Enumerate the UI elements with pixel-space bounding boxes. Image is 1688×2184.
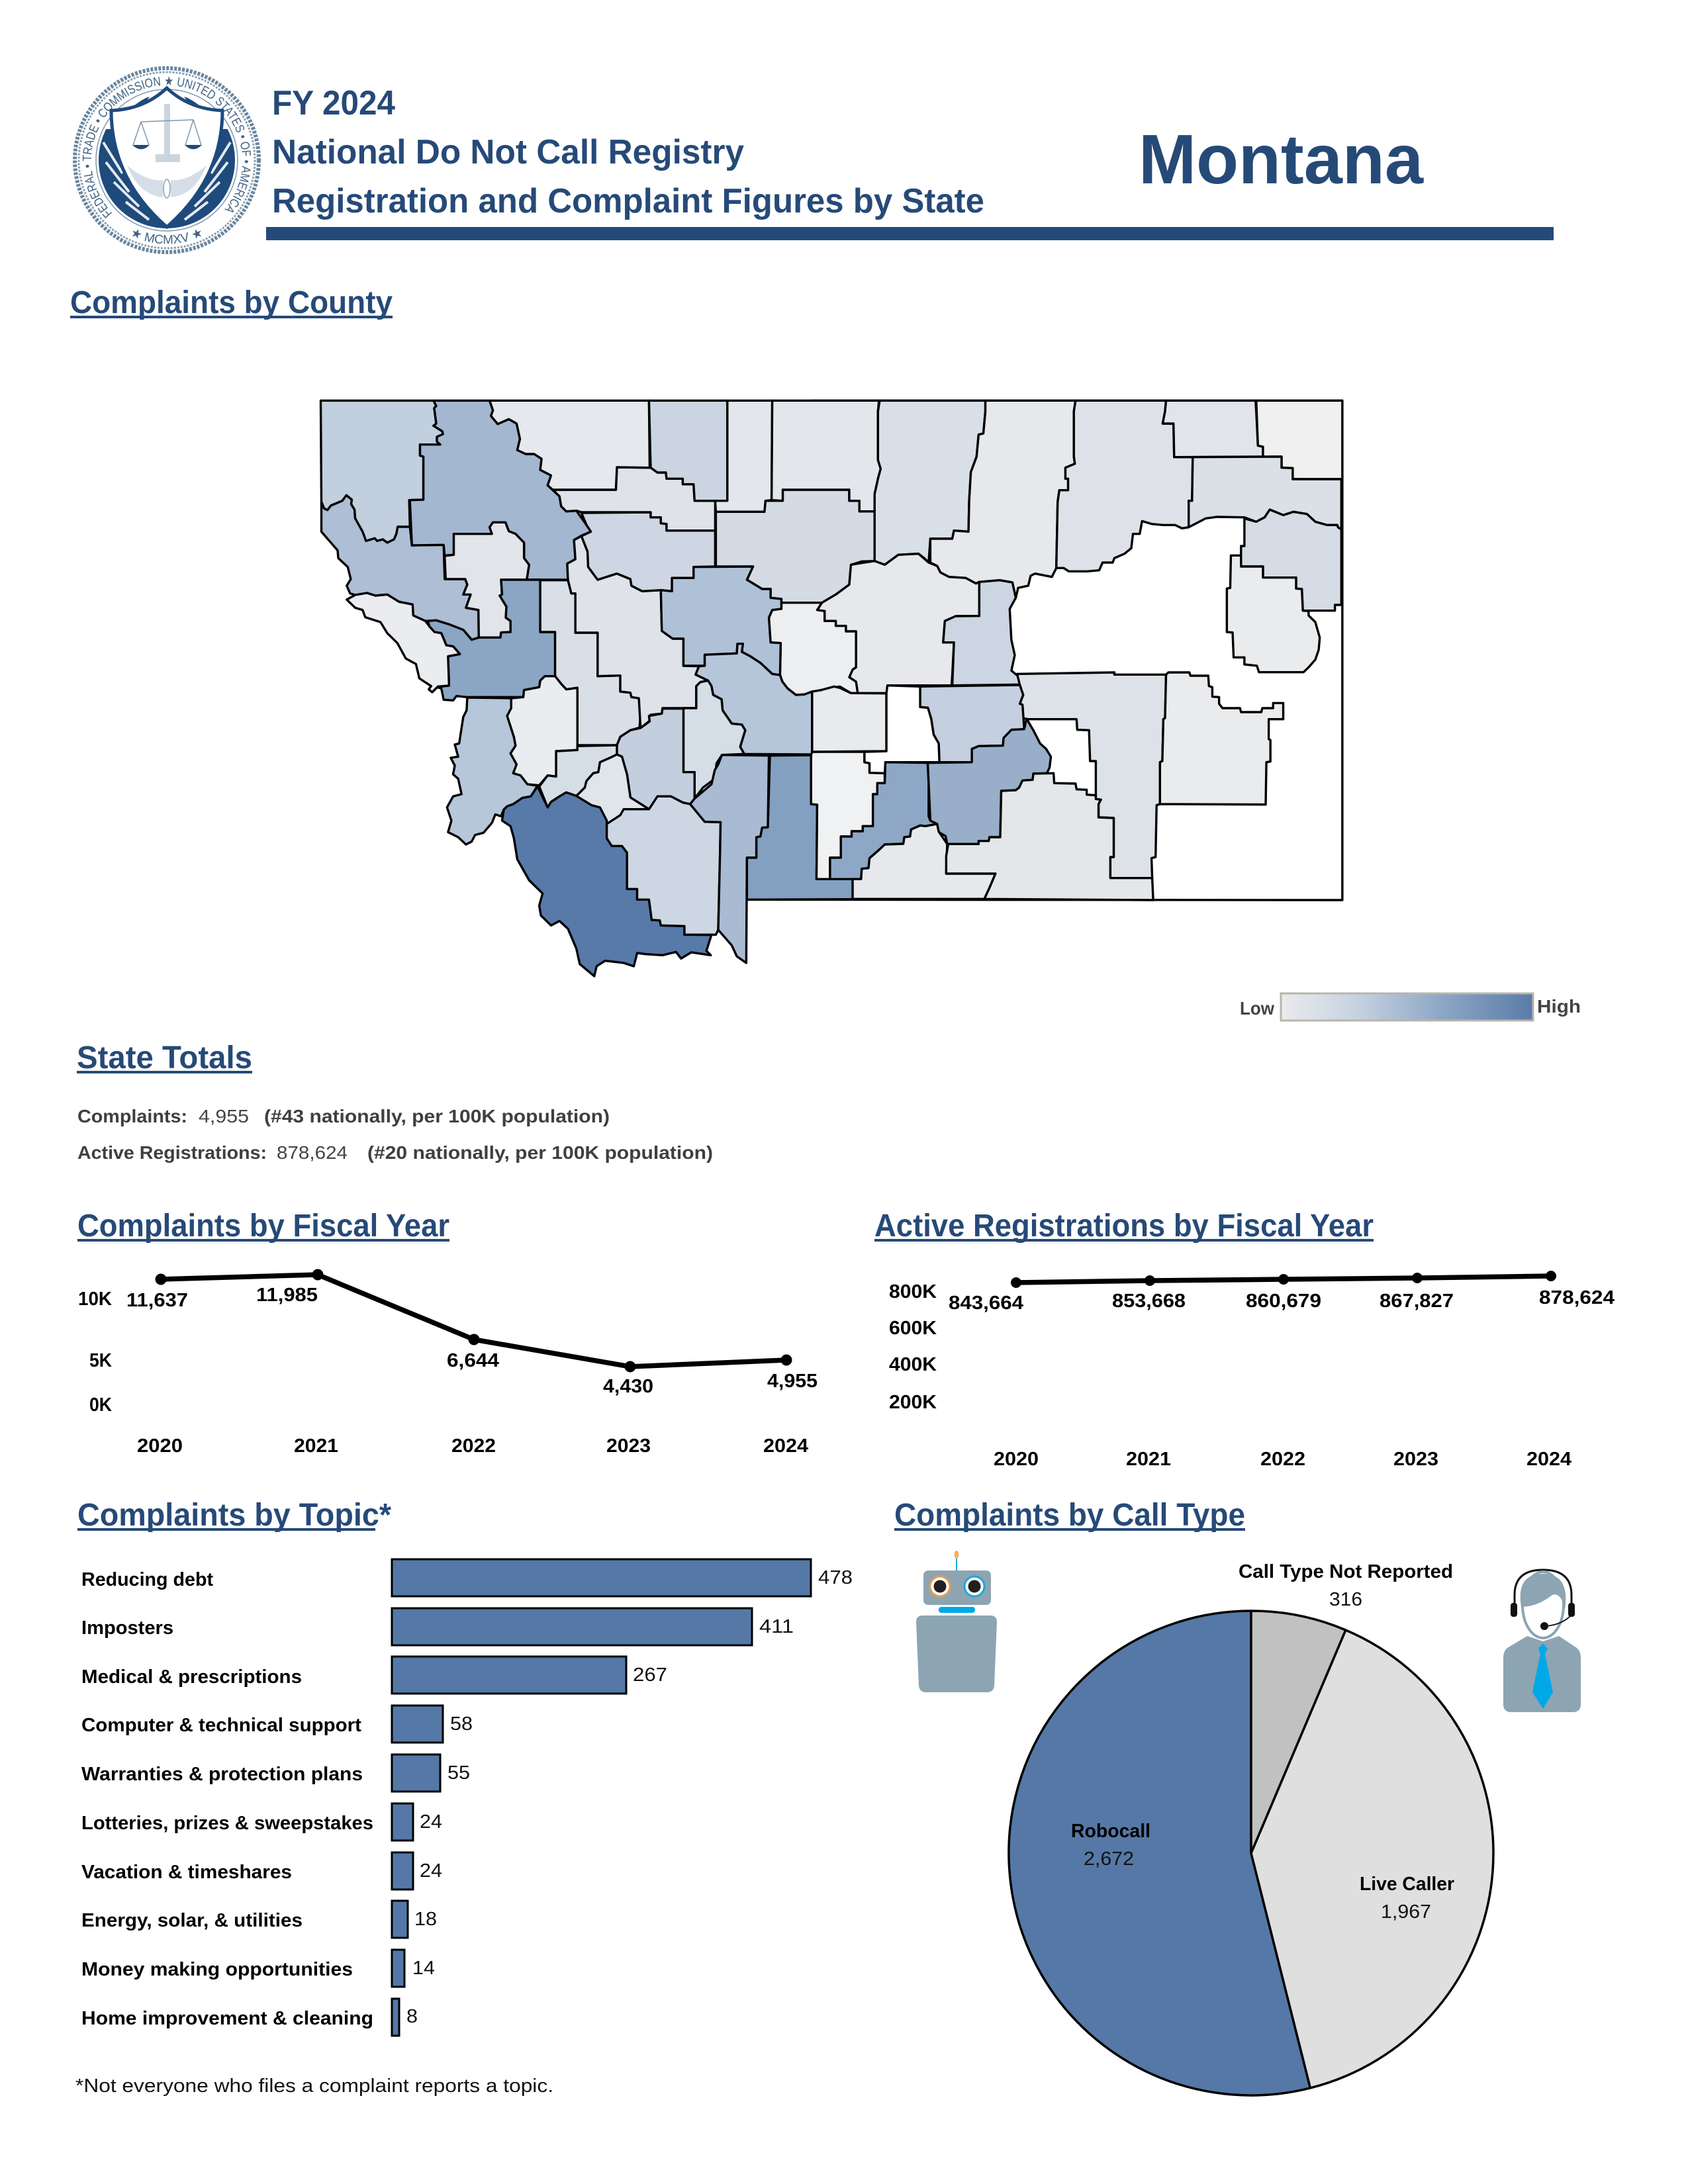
pie label: live caller xyxy=(1360,1874,1454,1923)
bar values: 55 xyxy=(447,1762,470,1784)
state name: Montana xyxy=(1139,120,1424,199)
title: fiscal year: FY 2024 xyxy=(272,84,395,122)
data labels: 6,644 xyxy=(447,1350,499,1371)
county: Dawson xyxy=(1227,555,1320,672)
county: Broadwater xyxy=(683,680,745,799)
slice: live caller xyxy=(1251,1630,1493,2088)
map: Montana counties xyxy=(320,400,1342,976)
topic labels: Energy, solar, & utilities xyxy=(81,1910,303,1931)
x axis labels xyxy=(994,1449,1571,1470)
state totals: complaints: Complaints: xyxy=(77,1106,187,1126)
pie label: live caller: 1,967 xyxy=(1381,1901,1431,1923)
county: Missoula xyxy=(428,580,555,700)
line chart: complaints by fiscal year xyxy=(78,1269,818,1457)
x axis labels: 2020 xyxy=(137,1435,183,1457)
data labels: 878,624 xyxy=(1539,1287,1615,1308)
heading: active registrations by fiscal year: Active Registrations by Fiscal Year xyxy=(874,1208,1374,1244)
county: Lincoln xyxy=(320,400,443,543)
heading: state totals: State Totals xyxy=(77,1040,252,1075)
bars xyxy=(392,1559,811,2036)
county: Richland xyxy=(1241,510,1341,611)
county: Deer Lodge xyxy=(539,745,617,807)
county: Custer xyxy=(1017,672,1166,878)
bar chart: complaints by topic xyxy=(81,1559,853,2036)
county: Lake xyxy=(445,522,529,637)
county: Mineral xyxy=(347,593,460,692)
data labels: 867,827 xyxy=(1380,1291,1454,1312)
county: Wheatland xyxy=(812,686,886,752)
y axis labels: 400K xyxy=(889,1354,937,1375)
data labels: 853,668 xyxy=(1112,1291,1186,1312)
heading: complaints by topic: Complaints by Topic* xyxy=(77,1498,391,1533)
county: Pondera xyxy=(553,467,715,531)
topic labels: Medical & prescriptions xyxy=(81,1666,302,1688)
x axis labels: 2022 xyxy=(1260,1449,1305,1470)
header rule xyxy=(266,227,1554,240)
topic labels: Money making opportunities xyxy=(81,1959,353,1980)
county base: no-data area with state outline xyxy=(747,400,1342,900)
y axis labels: 0K xyxy=(89,1394,112,1416)
series line xyxy=(161,1275,786,1367)
county: Meagher xyxy=(696,644,812,754)
county: Fallon xyxy=(1160,672,1284,805)
y axis labels: 5K xyxy=(89,1350,112,1371)
county: Jefferson xyxy=(617,709,694,809)
y axis labels: 600K xyxy=(889,1318,937,1339)
y axis labels: 200K xyxy=(889,1392,937,1413)
county: Lewis and Clark xyxy=(567,536,708,728)
state totals: active registrations: (#20 nationally, per 100K population) xyxy=(367,1142,713,1163)
x axis labels: 2021 xyxy=(294,1435,338,1457)
data labels: 4,430 xyxy=(603,1376,653,1397)
data labels xyxy=(949,1287,1615,1314)
county: Park xyxy=(747,755,853,899)
county: Phillips xyxy=(930,400,1076,598)
title: subtitle: Registration and Complaint Figures by State xyxy=(272,182,984,220)
pie label: robocall: 2,672 xyxy=(1084,1848,1134,1870)
bar values: 478 xyxy=(818,1567,853,1588)
title block xyxy=(272,84,984,220)
markers xyxy=(155,1269,792,1373)
line chart: active registrations by fiscal year xyxy=(889,1271,1615,1470)
bar values xyxy=(406,1567,853,2027)
county: Roosevelt xyxy=(1189,457,1341,529)
bar values: 14 xyxy=(412,1958,435,1979)
series line xyxy=(1016,1276,1551,1283)
county: Musselshell xyxy=(865,686,939,773)
county: Stillwater xyxy=(830,762,937,879)
x axis labels: 2021 xyxy=(1126,1449,1171,1470)
state totals: complaints: (#43 nationally, per 100K population) xyxy=(264,1106,610,1126)
x axis labels xyxy=(137,1435,808,1457)
bar values: 267 xyxy=(633,1664,667,1686)
data labels: 11,985 xyxy=(256,1285,318,1306)
state totals: complaints xyxy=(77,1106,610,1126)
county: Powell xyxy=(540,580,641,745)
heading: complaints by fiscal year: Complaints by Fiscal Year xyxy=(77,1208,449,1244)
topic labels: Imposters xyxy=(81,1617,173,1639)
county: Blaine xyxy=(874,400,986,565)
county: Golden Valley xyxy=(920,685,1024,762)
county: Carbon xyxy=(853,824,996,899)
county: Glacier xyxy=(490,400,649,490)
county: Beaverhead xyxy=(502,786,712,976)
bar values: 411 xyxy=(759,1616,794,1637)
county: Petroleum xyxy=(943,580,1020,686)
county: Granite xyxy=(507,676,577,786)
slice: robocall xyxy=(1009,1611,1310,2095)
data labels xyxy=(126,1285,818,1397)
county: Sheridan xyxy=(1256,400,1342,479)
state totals: active registrations: Active Registrations: xyxy=(77,1142,267,1163)
state totals: complaints: 4,955 xyxy=(199,1106,249,1126)
bar values: 24 xyxy=(420,1860,442,1882)
pie label: call type not reported: 316 xyxy=(1329,1589,1362,1610)
county: Gallatin xyxy=(690,755,769,963)
pie label: call type not reported xyxy=(1239,1561,1453,1610)
county: Madison xyxy=(607,796,721,934)
x axis labels: 2023 xyxy=(606,1435,651,1457)
bar values: 8 xyxy=(406,2006,418,2027)
footnote: *Not everyone who files a complaint reports a topic. xyxy=(75,2075,553,2097)
county: Fergus xyxy=(817,554,979,693)
legend: high label: High xyxy=(1537,996,1581,1017)
topic labels: Home improvement & cleaning xyxy=(81,2008,373,2029)
pie label: call type not reported: Call Type Not Reported xyxy=(1239,1561,1453,1582)
slice: call type not reported xyxy=(1251,1611,1346,1853)
county: Valley xyxy=(1056,400,1193,571)
county: Flathead xyxy=(410,400,591,580)
data labels: 860,679 xyxy=(1246,1291,1321,1312)
county: Ravalli xyxy=(447,698,538,844)
pie label: robocall: Robocall xyxy=(1071,1821,1150,1842)
icon: robot xyxy=(916,1551,997,1692)
title: registry name: National Do Not Call Registry xyxy=(272,133,744,171)
topic labels: Computer & technical support xyxy=(81,1715,361,1736)
y axis labels: 10K xyxy=(78,1289,112,1310)
pie chart: complaints by call type xyxy=(1009,1611,1493,2095)
y axis labels xyxy=(78,1289,112,1416)
county: Cascade xyxy=(661,567,781,675)
topic labels: Warranties & protection plans xyxy=(81,1764,363,1785)
county: Chouteau xyxy=(716,490,874,603)
county: Silver Bow xyxy=(577,754,649,824)
x axis labels: 2022 xyxy=(451,1435,496,1457)
county: Teton xyxy=(581,512,715,591)
county: Toole xyxy=(649,400,727,501)
map legend xyxy=(1240,993,1581,1021)
icon: live call agent xyxy=(1503,1570,1581,1712)
state totals: active registrations xyxy=(77,1142,713,1163)
county: Sweet Grass xyxy=(811,752,885,879)
county: Daniels xyxy=(1162,400,1263,457)
pie label: robocall xyxy=(1071,1821,1150,1870)
legend: low label: Low xyxy=(1240,998,1274,1019)
county: Big Horn xyxy=(946,773,1153,900)
bar values: 24 xyxy=(420,1811,442,1833)
bar values: 58 xyxy=(450,1713,473,1735)
data labels: 11,637 xyxy=(126,1290,188,1311)
y axis labels: 800K xyxy=(889,1281,937,1302)
county: Liberty xyxy=(715,400,773,512)
topic labels: Reducing debt xyxy=(81,1569,213,1590)
county: Hill xyxy=(772,400,880,512)
icon: FTC seal: FEDERAL • TRADE • COMMISSION ★ UNITED STATES • OF • AMERICA xyxy=(82,76,251,218)
x axis labels: 2023 xyxy=(1393,1449,1438,1470)
topic labels xyxy=(81,1569,373,2029)
x axis labels: 2024 xyxy=(1526,1449,1571,1470)
data labels: 4,955 xyxy=(767,1371,818,1392)
y axis labels xyxy=(889,1281,937,1413)
x axis labels: 2020 xyxy=(994,1449,1039,1470)
topic labels: Vacation & timeshares xyxy=(81,1862,292,1883)
county: Sanders xyxy=(322,495,479,640)
heading: complaints by call type: Complaints by Call Type xyxy=(894,1498,1245,1533)
bar values: 18 xyxy=(414,1909,437,1930)
county: Yellowstone xyxy=(927,719,1051,844)
topic labels: Lotteries, prizes & sweepstakes xyxy=(81,1813,373,1834)
county: Judith Basin xyxy=(769,603,858,695)
state totals: active registrations: 878,624 xyxy=(277,1142,348,1163)
legend: gradient bar xyxy=(1281,993,1533,1021)
data labels: 843,664 xyxy=(949,1293,1023,1314)
markers xyxy=(1011,1271,1556,1288)
x axis labels: 2024 xyxy=(763,1435,808,1457)
heading: complaints by county: Complaints by County xyxy=(70,285,393,320)
icon: FTC seal: ★ MCMXV ★ xyxy=(132,229,201,244)
pie label: live caller: Live Caller xyxy=(1360,1874,1454,1895)
